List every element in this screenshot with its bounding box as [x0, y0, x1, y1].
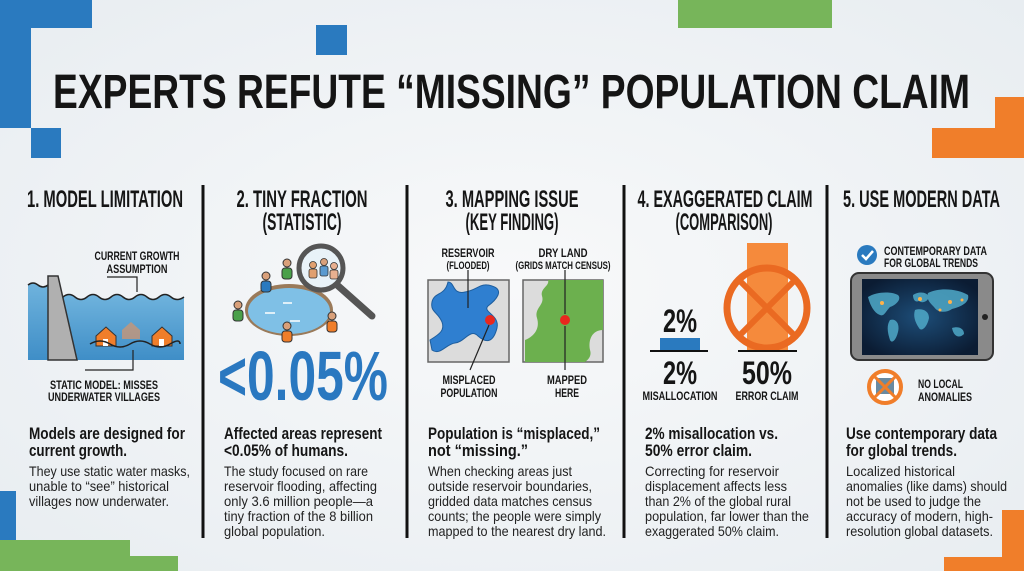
- text block 3: not “missing.”: [428, 441, 528, 460]
- panel: use modern data: FOR GLOBAL TRENDS: [884, 256, 978, 270]
- chart: 2% vs 50%: [642, 243, 807, 403]
- text block 2: Affected areas represent: [224, 424, 382, 443]
- labels: reservoir / dry land: RESERVOIR: [442, 246, 495, 260]
- panel: exaggerated claim: (COMPARISON): [676, 209, 772, 236]
- text block 3: gridded data matches census: [428, 493, 592, 509]
- text block 5: Localized historical: [846, 463, 955, 479]
- text block 5: for global trends.: [846, 441, 957, 460]
- text block 2: tiny fraction of the 8 billion: [224, 508, 373, 524]
- text block 1: villages now underwater.: [29, 493, 169, 509]
- panel: exaggerated claim: [638, 186, 812, 539]
- panel: model limitation: ASSUMPTION: [106, 262, 168, 276]
- text block 4: [645, 424, 809, 539]
- text block 3: Population is “misplaced,”: [428, 424, 600, 443]
- text block 5: accuracy of modern, high-: [846, 508, 993, 524]
- label: no local anomalies: NO LOCAL: [918, 377, 963, 391]
- text block 1: They use static water masks,: [29, 463, 190, 479]
- panel: tiny fraction: (STATISTIC): [262, 209, 342, 236]
- big stat: <0.05%: [218, 337, 388, 415]
- panel: tiny fraction: [218, 186, 388, 539]
- chart: 2% vs 50%: ERROR CLAIM: [736, 389, 798, 403]
- text block 3: [428, 424, 606, 539]
- heading 2: 2. TINY FRACTION: [236, 186, 368, 213]
- text block 2: <0.05% of humans.: [224, 441, 348, 460]
- illustration: lake with people and magnifier: [233, 246, 372, 342]
- labels: reservoir / dry land: DRY LAND: [538, 246, 588, 260]
- panel: model limitation: UNDERWATER VILLAGES: [48, 390, 160, 404]
- map: reservoir: [428, 270, 509, 370]
- panel: mapping issue: [428, 186, 611, 539]
- labels: reservoir / dry land: (FLOODED): [446, 260, 490, 272]
- labels: reservoir / dry land: (GRIDS MATCH CENSUS): [516, 260, 611, 272]
- heading 3: 3. MAPPING ISSUE: [446, 186, 578, 213]
- icon: check: [857, 245, 877, 265]
- text block 4: exaggerated 50% claim.: [645, 523, 779, 539]
- text block 3: outside reservoir boundaries,: [428, 478, 592, 494]
- icon: tablet with world map: [851, 273, 993, 360]
- text block 4: population, far lower than the: [645, 508, 809, 524]
- text block 4: 50% error claim.: [645, 441, 752, 460]
- labels: reservoir / dry land: MAPPED: [547, 373, 587, 387]
- text block 5: [846, 424, 1007, 539]
- panel: use modern data: ANOMALIES: [918, 390, 972, 404]
- text block 4: Correcting for reservoir: [645, 463, 779, 479]
- label: contemporary data: CONTEMPORARY DATA: [884, 244, 987, 258]
- text block 4: than 2% of the global rural: [645, 493, 791, 509]
- chart: 2% vs 50%: 2%: [663, 303, 697, 339]
- labels: reservoir / dry land: HERE: [555, 386, 579, 400]
- chart: 2% vs 50%: MISALLOCATION: [642, 389, 718, 403]
- text block 5: resolution global datasets.: [846, 523, 993, 539]
- text block 3: mapped to the nearest dry land.: [428, 523, 606, 539]
- labels: reservoir / dry land: POPULATION: [440, 386, 498, 400]
- text block 2: [224, 424, 382, 539]
- labels: reservoir / dry land: MISPLACED: [442, 373, 496, 387]
- panel: mapping issue: (KEY FINDING): [466, 209, 558, 236]
- heading 1: 1. MODEL LIMITATION: [27, 186, 183, 213]
- chart: 2% vs 50%: 2%: [663, 355, 697, 391]
- illustration: dam and flooded villages: [28, 276, 184, 370]
- text block 3: counts; the people were simply: [428, 508, 601, 524]
- label: current growth: CURRENT GROWTH: [94, 249, 180, 263]
- panel: use modern data: [843, 186, 1007, 539]
- text block 2: global population.: [224, 523, 325, 539]
- chart: 2% vs 50%: 50%: [742, 355, 792, 391]
- map: dry land: [523, 270, 603, 370]
- text block 2: reservoir flooding, affecting: [224, 478, 377, 494]
- labels: reservoir / dry land: [440, 246, 611, 400]
- text block 1: unable to “see” historical: [29, 478, 169, 494]
- text block 2: The study focused on rare: [224, 463, 368, 479]
- icon: no dams: [869, 371, 901, 403]
- text block 5: not be used to judge the: [846, 493, 981, 509]
- text block 1: current growth.: [29, 441, 127, 460]
- text block 1: [29, 424, 190, 509]
- text block 2: only 3.6 million people—a: [224, 493, 373, 509]
- text block 5: anomalies (like dams) should: [846, 478, 1007, 494]
- text block 3: When checking areas just: [428, 463, 572, 479]
- label: static model: STATIC MODEL: MISSES: [50, 378, 158, 392]
- text block 1: Models are designed for: [29, 424, 185, 443]
- heading 4: 4. EXAGGERATED CLAIM: [638, 186, 812, 213]
- text block 4: 2% misallocation vs.: [645, 424, 778, 443]
- panel: model limitation: [27, 186, 190, 509]
- text block 4: displacement affects less: [645, 478, 787, 494]
